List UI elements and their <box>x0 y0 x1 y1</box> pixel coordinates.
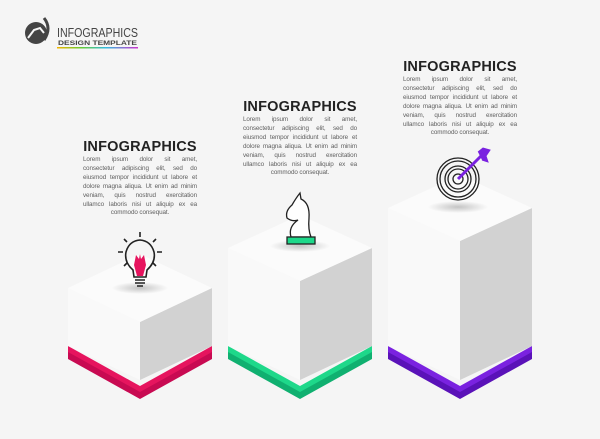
text block 1: ullamco laboris nisi ut aliquip ex ea <box>83 201 197 208</box>
text block 2: veniam, quis nostrud exercitation <box>243 152 357 159</box>
icon: chess knight <box>287 193 315 244</box>
text block 1: veniam, quis nostrud exercitation <box>83 192 197 199</box>
text block 2: consectetur adipiscing elit, sed do <box>243 125 357 132</box>
text block 1: consectetur adipiscing elit, sed do <box>83 165 197 172</box>
text block 1: dolore magna aliqua. Ut enim ad minim <box>83 183 197 190</box>
text block 3: eiusmod tempor incididunt ut labore et <box>403 94 517 101</box>
text block 2: ullamco laboris nisi ut aliquip ex ea <box>243 161 357 168</box>
logo <box>25 18 138 48</box>
text block 1: INFOGRAPHICS <box>83 139 197 155</box>
text block 2: commodo consequat. <box>271 169 329 176</box>
text block 3: consectetur adipiscing elit, sed do <box>403 85 517 92</box>
icon: target <box>437 148 490 200</box>
step 3 box <box>388 175 532 399</box>
step 2 box <box>228 215 372 399</box>
logo: DESIGN TEMPLATE <box>58 41 137 47</box>
text block 3: commodo consequat. <box>431 129 489 136</box>
text block 3: veniam, quis nostrud exercitation <box>403 112 517 119</box>
text block 3 <box>403 59 518 136</box>
text block 3: Lorem ipsum dolor sit amet, <box>403 76 517 83</box>
icon: light bulb <box>118 232 162 286</box>
text block 1: eiusmod tempor incididunt ut labore et <box>83 174 197 181</box>
text block 1: Lorem ipsum dolor sit amet, <box>83 156 197 163</box>
text block 3: INFOGRAPHICS <box>403 59 517 75</box>
text block 1 <box>83 139 198 216</box>
text block 2: INFOGRAPHICS <box>243 99 357 115</box>
text block 2: eiusmod tempor incididunt ut labore et <box>243 134 357 141</box>
step 1 box <box>68 254 212 399</box>
text block 3: ullamco laboris nisi ut aliquip ex ea <box>403 121 517 128</box>
text block 2: dolore magna aliqua. Ut enim ad minim <box>243 143 357 150</box>
text block 2 <box>243 99 358 176</box>
text block 3: dolore magna aliqua. Ut enim ad minim <box>403 103 517 110</box>
text block 1: commodo consequat. <box>111 209 169 216</box>
text block 2: Lorem ipsum dolor sit amet, <box>243 116 357 123</box>
logo: INFOGRAPHICS <box>57 25 138 40</box>
